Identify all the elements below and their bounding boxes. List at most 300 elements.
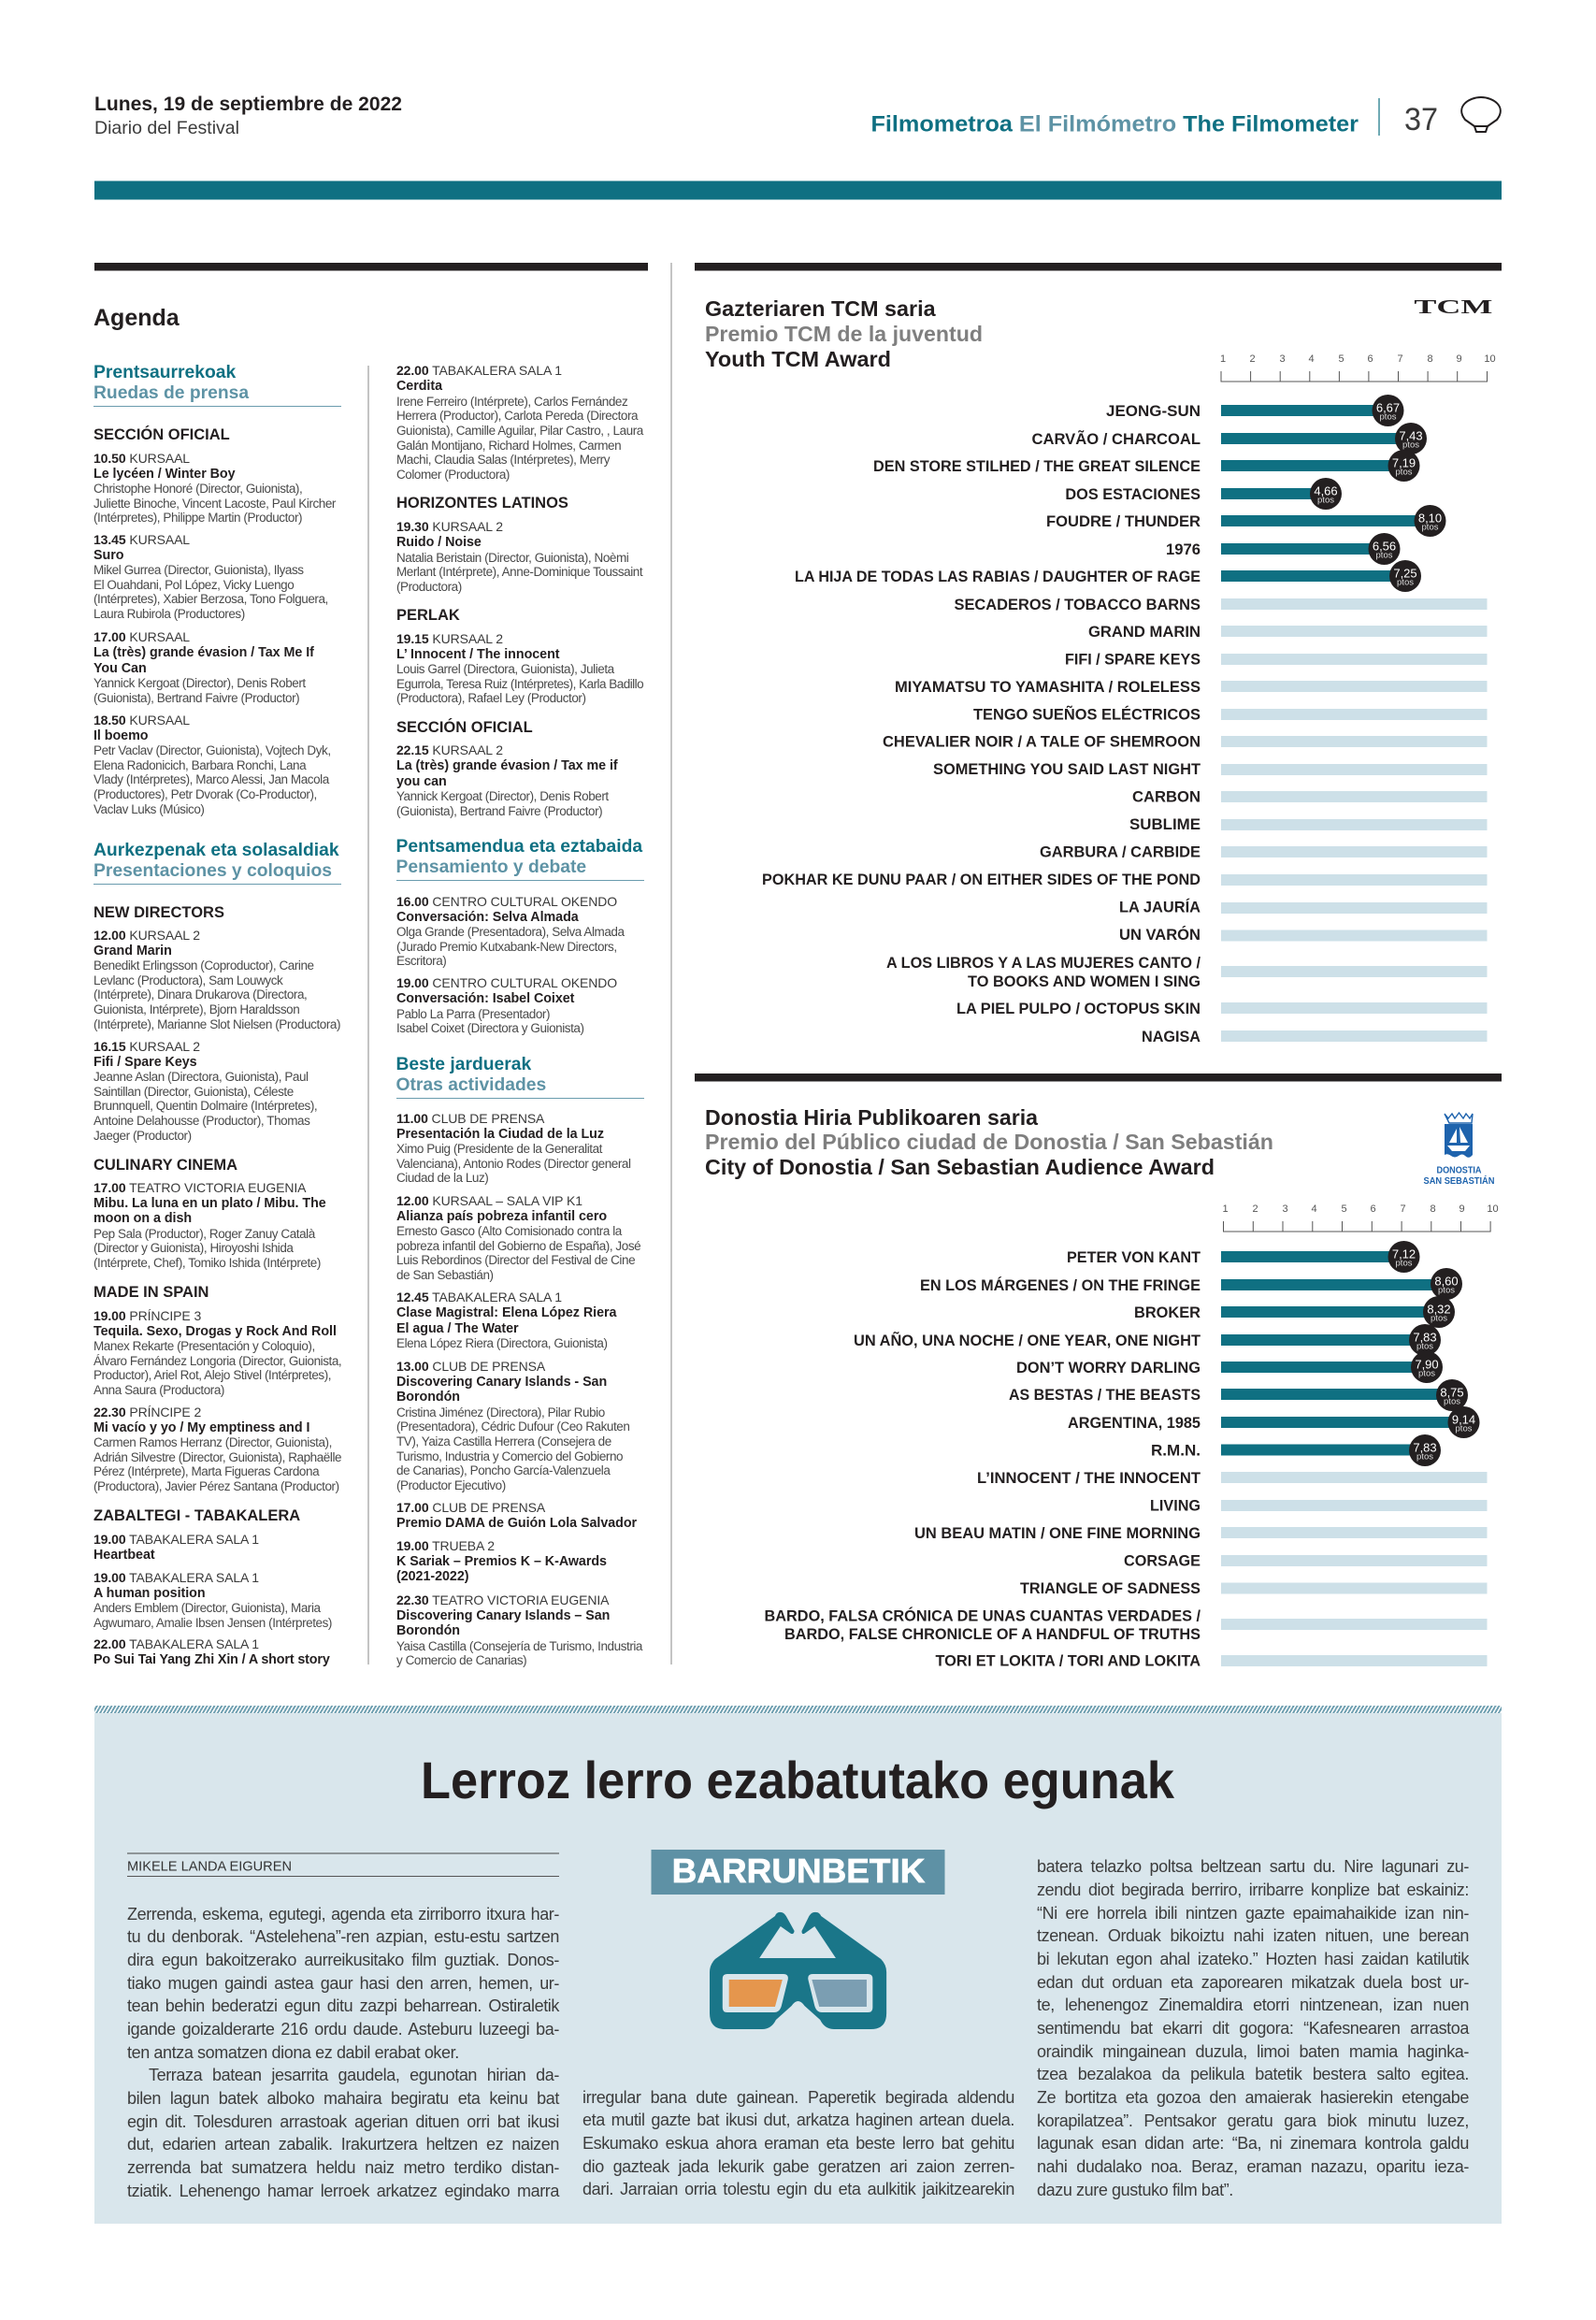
event: Fifi: Jeanne Aslan (Directora, Guionista), Paul: [93, 1070, 309, 1084]
text column: right: Ze bortitza eta gozoa den amaierak hasierekin etengabe: [1037, 2088, 1469, 2107]
row: R.M.N. 7,83: ptos: [1416, 1451, 1433, 1463]
event: Ciudad de la Luz: [396, 1111, 631, 1185]
row: CARBON: [1132, 789, 1487, 806]
event: Clase Magistral: 12.45 TABAKALERA SALA 1: [396, 1290, 562, 1304]
event: La (très) grande évasion: You Can: [93, 660, 147, 675]
logo: TCM: TCM: [1414, 295, 1493, 318]
event: Alianza país: Ernesto Gasco (Alto Comisionado contra la: [396, 1224, 622, 1238]
text column: right: dazu zure gustuko film bat”.: [1037, 2181, 1233, 2199]
section: Perlak: PERLAK: [396, 606, 460, 623]
event: K Sariak: (2021-2022): [396, 1569, 468, 1584]
row: AS BESTAS 8,75: [1009, 1379, 1468, 1411]
row: UN VARÓN: [1119, 926, 1487, 944]
event: Cerdita: Colomer (Productora): [396, 468, 510, 482]
event: Ciudad de la Luz: 11.00 CLUB DE PRENSA: [396, 1111, 544, 1126]
event: Discovering Canary Islands: [396, 1358, 629, 1492]
event: Il boemo: Vlady (Intérpretes), Marco Alessi, Jan Macola: [93, 772, 329, 786]
row: DEN STORE STILHED 7,19: DEN STORE STILHED / THE GREAT SILENCE: [873, 458, 1201, 475]
row: SOMETHING YOU SAID: SOMETHING YOU SAID LAST NIGHT: [933, 761, 1201, 778]
scale axis: audience award: 2: [1252, 1203, 1258, 1215]
icon: 3D glasses: [710, 1912, 886, 2029]
row: L'INNOCENT: [977, 1470, 1487, 1487]
row: CORSAGE: [1124, 1552, 1487, 1569]
event: Isabel Coixet: [396, 975, 617, 1035]
row: FIFI: [1065, 651, 1487, 668]
event: La (très) grande évasion: (Guionista), Bertrand Faivre (Productor): [396, 804, 602, 818]
subheading: thought and debate: [396, 836, 643, 881]
row: UN AÑO, UNA NOCHE 7,83: 7,83: [1413, 1330, 1437, 1345]
event: Suro: 13.45 KURSAAL: [93, 531, 190, 546]
scale axis: audience award: 1: [1222, 1203, 1229, 1215]
event: Mi vacío y yo: [93, 1405, 341, 1493]
row: PETER VON KANT 7,12: PETER VON KANT: [1067, 1249, 1201, 1266]
event: Clase Magistral: [396, 1290, 617, 1350]
event: Alianza país: pobreza infantil del Gobierno de España), José: [396, 1239, 640, 1253]
event: Mibu: (Director y Guionista), Hiroyoshi Ishida: [93, 1241, 293, 1255]
section: Horizontes Latinos: HORIZONTES LATINOS: [396, 495, 568, 512]
event: Isabel Coixet: Conversación: Isabel Coixet: [396, 991, 574, 1006]
event: Cerdita: 22.00 TABAKALERA SALA 1: [396, 363, 562, 378]
text column: right: [1037, 1857, 1470, 2199]
event: Alianza país: de San Sebastián): [396, 1268, 494, 1282]
event: La (très) grande évasion: (Guionista), Bertrand Faivre (Productor): [93, 691, 299, 705]
row: TRIANGLE OF SADNESS: [1020, 1580, 1487, 1597]
scale axis: youth award: 6: [1367, 353, 1373, 365]
event: Mi vacío y yo: Adrián Silvestre (Director, Guionista), Raphaëlle: [93, 1450, 341, 1464]
row: POKHAR KE DUNU PAAR: [762, 872, 1487, 888]
row: A LOS LIBROS: TO BOOKS AND WOMEN I SING: [968, 973, 1201, 990]
event: Discovering Canary Islands: 13.00 CLUB DE PRENSA: [396, 1358, 545, 1373]
event: Tequila: 19.00 PRÍNCIPE 3: [93, 1307, 201, 1322]
subheading: presentations: [93, 840, 341, 885]
row: CORSAGE: CORSAGE: [1124, 1552, 1201, 1569]
row: BARDO: [765, 1607, 1487, 1643]
row: UN BEAU MATIN: UN BEAU MATIN / ONE FINE MORNING: [914, 1525, 1201, 1542]
event: Le lycéen: Juliette Binoche, Vincent Lacoste, Paul Kircher: [93, 497, 336, 511]
row: PETER VON KANT 7,12: ptos: [1396, 1259, 1413, 1268]
text column: left: [127, 1905, 559, 2200]
event: Isabel Coixet: 19.00 CENTRO CULTURAL OKENDO: [396, 975, 617, 990]
row: MIYAMATSU: [895, 679, 1487, 696]
text column: right: oraindik mingainean duzula, limoi baten mamia haginka-: [1037, 2042, 1469, 2061]
event: Fifi: 16.15 KURSAAL 2: [93, 1038, 200, 1053]
row: MIYAMATSU: MIYAMATSU TO YAMASHITA / ROLELESS: [895, 679, 1201, 696]
text column: right: lagunak esan didan arte: “Ba, ni zinemara kontrola galdu: [1037, 2134, 1469, 2153]
row: EN LOS MÁRGENES 8,60: ptos: [1438, 1285, 1455, 1296]
event: Isabel Coixet: Isabel Coixet (Directora y Guionista): [396, 1021, 584, 1035]
row: BROKER 8,32: [1134, 1296, 1455, 1328]
row: EN LOS MÁRGENES 8,60: 8,60: [1434, 1274, 1459, 1289]
event: Fifi: Jaeger (Productor): [93, 1129, 192, 1143]
event: Grand Marin: Guionista, Intérprete), Bjorn Haraldsson: [93, 1002, 299, 1016]
event: Fifi: Saintillan (Director, Guionista), Céleste: [93, 1085, 294, 1099]
event: Il boemo: Petr Vaclav (Director, Guionista), Vojtech Dyk,: [93, 743, 331, 757]
label: BARRUNBETIK: BARRUNBETIK: [672, 1852, 925, 1890]
event: Alianza país: Luis Rebordinos (Director del Festival de Cine: [396, 1253, 635, 1267]
row: JEONG-SUN 6,67: 6,67: [1376, 400, 1400, 415]
section: Zabaltegi: ZABALTEGI - TABAKALERA: [93, 1507, 300, 1524]
row: R.M.N. 7,83: R.M.N.: [1151, 1442, 1201, 1459]
event: Tequila: Tequila. Sexo, Drogas y Rock And Roll: [93, 1324, 337, 1339]
scale axis: audience award: 9: [1459, 1203, 1465, 1215]
column divider: agenda columns: [367, 366, 369, 1664]
row: UN AÑO, UNA NOCHE 7,83: ptos: [1416, 1341, 1433, 1352]
row: 1976 6,56: 6,56: [1373, 539, 1396, 554]
event: Tequila: Productor), Ariel Rot, Alejo Stivel (Intérpretes),: [93, 1368, 331, 1382]
event: La (très) grande évasion: La (très) grande évasion / Tax me if: [396, 758, 618, 773]
row: DON'T WORRY DARLING 7,90: [1016, 1351, 1443, 1383]
text column: middle: [582, 2088, 1014, 2198]
row: LA JAURÍA: LA JAURÍA: [1119, 898, 1201, 916]
bar chart: audience award: [765, 1241, 1487, 1670]
text column: left: dira egun bakoitzerako aurreikusitako film guztiak. Donos-: [127, 1951, 559, 1969]
row: TENGO SUEÑOS: [973, 705, 1487, 724]
event: Fifi: Brunnquell, Quentin Dolmaire (Intérpretes),: [93, 1099, 317, 1113]
text column: right: te, lehenengoz Zinemaldira etorri nintzenean, izan nuen: [1037, 1996, 1469, 2014]
byline: MIKELE LANDA EIGUREN: [127, 1859, 292, 1874]
event: Cerdita: [396, 363, 643, 482]
event: Premio DAMA: [396, 1500, 637, 1530]
event: Tequila: [93, 1307, 341, 1397]
row: SUBLIME: [1129, 816, 1487, 833]
event: A human position: 19.00 TABAKALERA SALA 1: [93, 1569, 259, 1584]
event: Selva Almada: (Jurado Premio Kutxabank-New Directors,: [396, 940, 617, 954]
event: Grand Marin: Grand Marin: [93, 943, 172, 958]
logo: Donostia San Sebastián: SAN SEBASTIÁN: [1423, 1174, 1494, 1187]
event: Il boemo: Il boemo: [93, 728, 148, 742]
subheading: press conferences: [93, 361, 341, 406]
scale axis: youth award: 4: [1308, 353, 1315, 365]
header: date and publication: Diario del Festival: [94, 118, 239, 138]
panel: opinion column: [94, 1706, 1502, 2224]
event: Suro: (Intérpretes), Xabier Berzosa, Tono Folguera,: [93, 592, 328, 606]
header: section title: Filmometroa El Filmómetro The Filmometer: [871, 112, 1359, 137]
event: Ciudad de la Luz: Ximo Puig (Presidente de la Generalitat: [396, 1142, 602, 1156]
headline: Lerroz lerro ezabatutako egunak: [421, 1751, 1174, 1809]
text column: right: edan dut orduan eta zaporearen mikatzak duela bost ur-: [1037, 1973, 1469, 1992]
text column: middle: irregular bana dute gainean. Paperetik begirada aldendu: [582, 2088, 1014, 2107]
event: Mibu: moon on a dish: [93, 1211, 192, 1226]
row: GRAND MARIN: GRAND MARIN: [1088, 624, 1201, 641]
panel heading: youth TCM award: Premio TCM de la juventud: [705, 322, 983, 346]
row: DOS ESTACIONES 4,66: ptos: [1317, 496, 1334, 505]
row: DEN STORE STILHED 7,19: 7,19: [1392, 456, 1416, 469]
event: Il boemo: [93, 713, 331, 816]
scale axis: audience award: 4: [1311, 1203, 1317, 1215]
event: L'Innocent: (Productora), Rafael Ley (Productor): [396, 691, 586, 705]
scale axis: youth award: 8: [1427, 353, 1433, 365]
event: Discovering Canary Islands 22.30: y Comercio de Canarias): [396, 1653, 526, 1667]
row: CHEVALIER NOIR: CHEVALIER NOIR / A TALE OF SHEMROON: [883, 733, 1201, 750]
panel heading: audience award: Donostia Hiria Publikoaren saria: [705, 1105, 1038, 1130]
event: Mi vacío y yo: Mi vacío y yo / My emptiness and I: [93, 1419, 309, 1434]
text column: left: zerrenda bat sumatzera heldu naiz metro terdiko distan-: [127, 2158, 559, 2177]
black rule: youth award: [695, 263, 1502, 271]
event: Selva Almada: Conversación: Selva Almada: [396, 909, 579, 924]
event: La (très) grande évasion: La (très) grande évasion / Tax Me If: [93, 645, 314, 660]
event: Selva Almada: 16.00 CENTRO CULTURAL OKENDO: [396, 894, 617, 909]
section: Made in Spain: MADE IN SPAIN: [93, 1283, 208, 1300]
scale axis: youth award: 7: [1397, 353, 1403, 365]
subheading: presentations: Aurkezpenak eta solasaldiak: [93, 841, 339, 860]
event: Alianza país: [396, 1193, 640, 1282]
row: GARBURA: GARBURA / CARBIDE: [1040, 843, 1201, 860]
event: Clase Magistral: Clase Magistral: Elena López Riera: [396, 1305, 616, 1320]
subheading: other activities: Otras actividades: [396, 1075, 546, 1094]
row: TORI ET LOKITA: [935, 1653, 1487, 1670]
text column: left: tean behin bederatzi egun ditu zazpi beharrean. Ostiraletik: [127, 1996, 559, 2015]
text column: left: igande goizalderarte 216 ordu daude. Asteburu luzeegi ba-: [127, 2020, 559, 2039]
row: POKHAR KE DUNU PAAR: POKHAR KE DUNU PAAR / ON EITHER SIDES OF THE POND: [762, 872, 1201, 888]
column divider: agenda and charts: [670, 263, 672, 1664]
text column: right: “Ni ere horrela ibili nintzen gazte epaimahaikide izan nin-: [1037, 1904, 1469, 1923]
event: Discovering Canary Islands 22.30: Yaisa Castilla (Consejería de Turismo, Industria: [396, 1638, 642, 1653]
event: Mibu: [93, 1180, 326, 1270]
row: FIFI: FIFI / SPARE KEYS: [1065, 651, 1201, 668]
event: Suro: Mikel Gurrea (Director, Guionista), Ilyass: [93, 563, 304, 577]
row: BARDO: BARDO, FALSA CRÓNICA DE UNAS CUANTAS VERDADES /: [765, 1607, 1201, 1625]
text column: left: dut, edarien artean zabalik. Irakurtzera heltzen ez naizen: [127, 2135, 559, 2154]
row: PETER VON KANT 7,12: [1067, 1241, 1419, 1273]
row: NAGISA: NAGISA: [1142, 1029, 1201, 1045]
event: La (très) grande évasion: Yannick Kergoat (Director), Denis Robert: [396, 789, 609, 803]
event: La (très) grande évasion: you can: [396, 774, 447, 789]
panel heading: youth TCM award: Youth TCM Award: [705, 347, 891, 371]
text column: right: tzenean. Orduak bikoiztu nahi izaten nituen, une berean: [1037, 1926, 1469, 1945]
event: Discovering Canary Islands 22.30: Borondón: [396, 1623, 460, 1638]
event: Selva Almada: [396, 894, 625, 968]
panel: agenda: [93, 305, 644, 1667]
event: Discovering Canary Islands: de Canarias), Poncho García-Valenzuela: [396, 1463, 610, 1477]
text column: left: bilen lagun batek alboko mahaira begiratu eta keinu bat: [127, 2089, 559, 2108]
scale axis: youth award: 9: [1456, 353, 1462, 365]
panel heading: audience award: City of Donostia / San Sebastian Audience Award: [705, 1155, 1215, 1179]
row: CHEVALIER NOIR: [883, 733, 1487, 750]
event: Ciudad de la Luz: Ciudad de la Luz): [396, 1171, 488, 1185]
subheading: other activities: Beste jarduerak: [396, 1055, 531, 1074]
heading: Agenda: Agenda: [93, 305, 180, 331]
event: Mibu: 17.00 TEATRO VICTORIA EUGENIA: [93, 1180, 306, 1195]
event: Heartbeat: Heartbeat: [93, 1547, 155, 1562]
page number: [1379, 98, 1438, 137]
row: DOS ESTACIONES 4,66: DOS ESTACIONES: [1065, 486, 1201, 503]
event: L'Innocent: Egurrola, Teresa Ruiz (Intérpretes), Karla Badillo: [396, 677, 643, 691]
row: PETER VON KANT 7,12: 7,12: [1392, 1247, 1416, 1261]
row: SOMETHING YOU SAID: [933, 761, 1487, 778]
text column: middle: dio gazteak jada lekurik gabe geratzen ari zaion zerren-: [582, 2157, 1014, 2176]
event: Suro: Laura Rubirola (Productores): [93, 607, 245, 621]
event: L'Innocent: L’ Innocent / The innocent: [396, 647, 560, 662]
page number: 37: [1404, 102, 1438, 137]
scale axis: audience award: 10: [1487, 1203, 1499, 1215]
scale axis: audience award: 8: [1430, 1203, 1436, 1215]
event: Tequila: Anna Saura (Productora): [93, 1383, 224, 1397]
row: DOS ESTACIONES 4,66: 4,66: [1314, 484, 1338, 497]
event: Mibu: (Intérprete, Chef), Tomiko Ishida (Intérprete): [93, 1256, 321, 1270]
text column: left: egin dit. Tolesduren arrastoak agerian dituen orri bat ikusi: [127, 2112, 559, 2131]
event: L'Innocent: [396, 630, 643, 705]
event: Grand Marin: (Intérprete), Dinara Drukarova (Directora,: [93, 987, 307, 1001]
scale axis: youth award: 2: [1249, 353, 1256, 365]
event: Discovering Canary Islands: Turismo, Industria y Comercio del Gobierno: [396, 1449, 623, 1463]
event: L'Innocent: 19.15 KURSAAL 2: [396, 630, 503, 645]
text column: left: Zerrenda, eskema, egutegi, agenda eta zirriborro itxura har-: [127, 1905, 559, 1924]
event: Discovering Canary Islands 22.30: [396, 1592, 643, 1667]
scale axis: audience award: 7: [1400, 1203, 1406, 1215]
row: NAGISA: [1142, 1029, 1487, 1045]
event: Mibu: Mibu. La luna en un plato / Mibu. The: [93, 1195, 326, 1210]
header: date and publication: Lunes, 19 de septiembre de 2022: [94, 94, 402, 115]
event: Tequila: Álvaro Fernández Longoria (Director, Guionista,: [93, 1354, 341, 1368]
event: Clase Magistral: El agua / The Water: [396, 1320, 519, 1335]
row: LIVING: LIVING: [1150, 1498, 1201, 1515]
section: Sección Oficial: SECCIÓN OFICIAL: [396, 719, 533, 736]
row: ARGENTINA, 1985 9,14: ptos: [1456, 1423, 1473, 1434]
event: Mi vacío y yo: (Productora), Javier Pérez Santana (Productor): [93, 1479, 339, 1493]
event: A human position: Agwumaro, Amalie Ibsen Jensen (Intérpretes): [93, 1616, 332, 1630]
event: Suro: [93, 531, 328, 621]
row: TORI ET LOKITA: TORI ET LOKITA / TORI AND LOKITA: [935, 1653, 1201, 1670]
section: New Directors: NEW DIRECTORS: [93, 903, 224, 920]
event: La (très) grande évasion: [93, 629, 314, 705]
row: AS BESTAS 8,75: AS BESTAS / THE BEASTS: [1009, 1387, 1201, 1404]
event: Grand Marin: [93, 928, 340, 1031]
text column: right: tzea bezalakoa da pelikula batetik bestera salto egitea.: [1037, 2065, 1469, 2083]
event: K Sariak: [396, 1537, 607, 1584]
row: GARBURA: [1040, 843, 1487, 860]
event: Le lycéen: (Intérpretes), Philippe Martin (Productor): [93, 511, 302, 525]
event: Discovering Canary Islands: (Productor Ejecutivo): [396, 1478, 506, 1492]
event: Discovering Canary Islands: Cristina Jiménez (Directora), Pilar Rubio: [396, 1405, 605, 1419]
row: L'INNOCENT: L’INNOCENT / THE INNOCENT: [977, 1470, 1201, 1487]
subheading: press conferences: Prentsaurrekoak: [93, 363, 236, 382]
event: Cerdita: Herrera (Productor), Carlota Pereda (Directora: [396, 409, 638, 423]
event: Grand Marin: Levlanc (Productora), Sam Louwyck: [93, 973, 282, 987]
row: CARVÃO 7,43: 7,43: [1399, 428, 1423, 443]
event: Discovering Canary Islands 22.30: Discovering Canary Islands – San: [396, 1608, 610, 1623]
event: Fifi: Antoine Delahousse (Productor), Thomas: [93, 1114, 309, 1128]
scale axis: youth award: 10: [1484, 353, 1496, 365]
row: R.M.N. 7,83: 7,83: [1413, 1440, 1437, 1455]
row: ARGENTINA, 1985 9,14: 9,14: [1452, 1412, 1475, 1427]
event: Po Sui Tai Yang Zhi Xin: Po Sui Tai Yang Zhi Xin / A short story: [93, 1652, 330, 1667]
row: FOUDRE 8,10: [1046, 505, 1445, 537]
row: CARBON: CARBON: [1132, 789, 1201, 806]
row: JEONG-SUN 6,67: JEONG-SUN: [1106, 403, 1201, 420]
scale axis: audience award: 5: [1341, 1203, 1347, 1215]
event: Il boemo: (Productores), Petr Dvorak (Co-Productor),: [93, 787, 317, 801]
subheading: press conferences: Ruedas de prensa: [93, 383, 249, 402]
row: DON'T WORRY DARLING 7,90: 7,90: [1415, 1358, 1439, 1371]
event: Ruido: (Productora): [396, 580, 462, 594]
event: Il boemo: 18.50 KURSAAL: [93, 713, 190, 728]
row: LA JAURÍA: [1119, 898, 1487, 916]
event: Clase Magistral: Elena López Riera (Directora, Guionista): [396, 1336, 608, 1350]
row: BARDO: BARDO, FALSE CHRONICLE OF A HANDFUL OF TRUTHS: [784, 1626, 1201, 1643]
event: A human position: Anders Emblem (Director, Guionista), Maria: [93, 1601, 321, 1615]
event: Mi vacío y yo: Carmen Ramos Herranz (Director, Guionista),: [93, 1435, 332, 1449]
row: ARGENTINA, 1985 9,14: ARGENTINA, 1985: [1068, 1415, 1201, 1432]
row: LA HIJA 7,25: 7,25: [1393, 567, 1417, 580]
event: Ruido: Ruido / Noise: [396, 535, 482, 550]
row: EN LOS MÁRGENES 8,60: EN LOS MÁRGENES / ON THE FRINGE: [920, 1276, 1201, 1294]
event: Premio DAMA: Premio DAMA de Guión Lola Salvador: [396, 1515, 637, 1530]
row: JEONG-SUN 6,67: ptos: [1380, 411, 1397, 423]
row: SECADEROS: SECADEROS / TOBACCO BARNS: [954, 597, 1201, 613]
event: Il boemo: Elena Radonicich, Barbara Ronchi, Lana: [93, 758, 306, 772]
event: La (très) grande évasion: 22.15 KURSAAL 2: [396, 742, 503, 757]
row: EN LOS MÁRGENES 8,60: [920, 1268, 1462, 1300]
text column: left: tu du denborak. “Astelehena”-ren azpian, estu-estu sartzen: [127, 1927, 559, 1946]
row: DON'T WORRY DARLING 7,90: DON’T WORRY DARLING: [1016, 1360, 1201, 1376]
row: LIVING: [1150, 1498, 1487, 1515]
panel heading: audience award: Premio del Público ciudad de Donostia / San Sebastián: [705, 1130, 1273, 1154]
event: Suro: Suro: [93, 548, 123, 563]
event: A human position: [93, 1569, 332, 1630]
text column: middle: dari. Jarraian orria tolestu egin du eta aulkitik jaikitzearekin: [582, 2180, 1014, 2198]
event: Alianza país: 12.00 KURSAAL – SALA VIP K1: [396, 1193, 582, 1208]
event: Discovering Canary Islands: Discovering Canary Islands - San: [396, 1375, 607, 1390]
event: Ciudad de la Luz: Presentación la Ciudad de la Luz: [396, 1126, 604, 1141]
row: 1976 6,56: 1976: [1166, 541, 1201, 558]
event: Discovering Canary Islands: TV), Yaiza Castilla Herrera (Consejera de: [396, 1434, 611, 1448]
row: LA PIEL PULPO: LA PIEL PULPO / OCTOPUS SKIN: [956, 1001, 1201, 1017]
panel heading: youth TCM award: [705, 296, 983, 371]
event: Discovering Canary Islands: (Presentadora), Cédric Dufour (Ceo Rakuten: [396, 1419, 629, 1434]
event: Po Sui Tai Yang Zhi Xin: 22.00 TABAKALERA SALA 1: [93, 1636, 259, 1651]
section: Culinary Cinema: CULINARY CINEMA: [93, 1156, 237, 1173]
event: Heartbeat: [93, 1532, 259, 1562]
row: SECADEROS: [954, 597, 1487, 613]
row: TENGO SUEÑOS: TENGO SUEÑOS ELÉCTRICOS: [973, 705, 1201, 724]
text column: left: tiako mugen gaindi astea gaur hasi den arren, hemen, ur-: [127, 1974, 559, 1993]
text column: right: bi lekutan egon ahal izateko.” Hozten hasi zaidan katilutik: [1037, 1950, 1469, 1968]
text column: left: ten antza somatzen diona ez dabil erabat oker.: [127, 2043, 459, 2062]
event: Suro: El Ouahdani, Pol López, Vicky Luengo: [93, 578, 294, 592]
event: Premio DAMA: 17.00 CLUB DE PRENSA: [396, 1500, 545, 1515]
event: Mibu: Pep Sala (Productor), Roger Zanuy Català: [93, 1227, 315, 1240]
logo: Donostia San Sebastián: DONOSTIA: [1436, 1165, 1482, 1176]
row: DOS ESTACIONES 4,66: [1065, 478, 1342, 510]
event: Po Sui Tai Yang Zhi Xin: [93, 1636, 330, 1667]
event: Le lycéen: 10.50 KURSAAL: [93, 451, 190, 466]
row: 1976 6,56: ptos: [1376, 550, 1393, 561]
text column: right: nahi dudalako noa. Beraz, eraman nazazu, oparitu ieza-: [1037, 2157, 1469, 2176]
row: BROKER 8,32: BROKER: [1134, 1304, 1201, 1321]
text column: middle: Eskumako eskua ahora eraman eta beste lerro bat gehitu: [582, 2134, 1014, 2153]
scale axis: audience award: 6: [1370, 1203, 1376, 1215]
event: Mi vacío y yo: 22.30 PRÍNCIPE 2: [93, 1405, 201, 1419]
row: A LOS LIBROS: [886, 955, 1487, 990]
event: Ciudad de la Luz: Valenciana), Antonio Rodes (Director general: [396, 1157, 631, 1171]
event: Cerdita: Cerdita: [396, 379, 442, 394]
text column: middle: eta mutil gazte bat ikusi dut, arkatza haginen artean duela.: [582, 2111, 1014, 2129]
event: Grand Marin: 12.00 KURSAAL 2: [93, 928, 200, 943]
row: AS BESTAS 8,75: 8,75: [1440, 1386, 1464, 1399]
event: Selva Almada: Olga Grande (Presentadora), Selva Almada: [396, 925, 625, 939]
event: Cerdita: Galán Montijano, Richard Holmes, Carmen: [396, 439, 621, 453]
scale axis: youth award: 5: [1338, 353, 1344, 365]
event: K Sariak: 19.00 TRUEBA 2: [396, 1537, 495, 1552]
event: Ruido: Natalia Beristain (Director, Guionista), Noèmi: [396, 550, 628, 565]
event: Cerdita: Guionista), Camille Aguilar, Pilar Castro, , Laura: [396, 424, 643, 438]
header: date and publication: [94, 94, 402, 138]
event: Fifi: [93, 1038, 317, 1143]
row: LA HIJA 7,25: [795, 560, 1421, 592]
event: L'Innocent: Louis Garrel (Directora, Guionista), Julieta: [396, 662, 614, 676]
scale axis: youth award: 3: [1279, 353, 1286, 365]
section: Sección Oficial: SECCIÓN OFICIAL: [93, 426, 230, 443]
